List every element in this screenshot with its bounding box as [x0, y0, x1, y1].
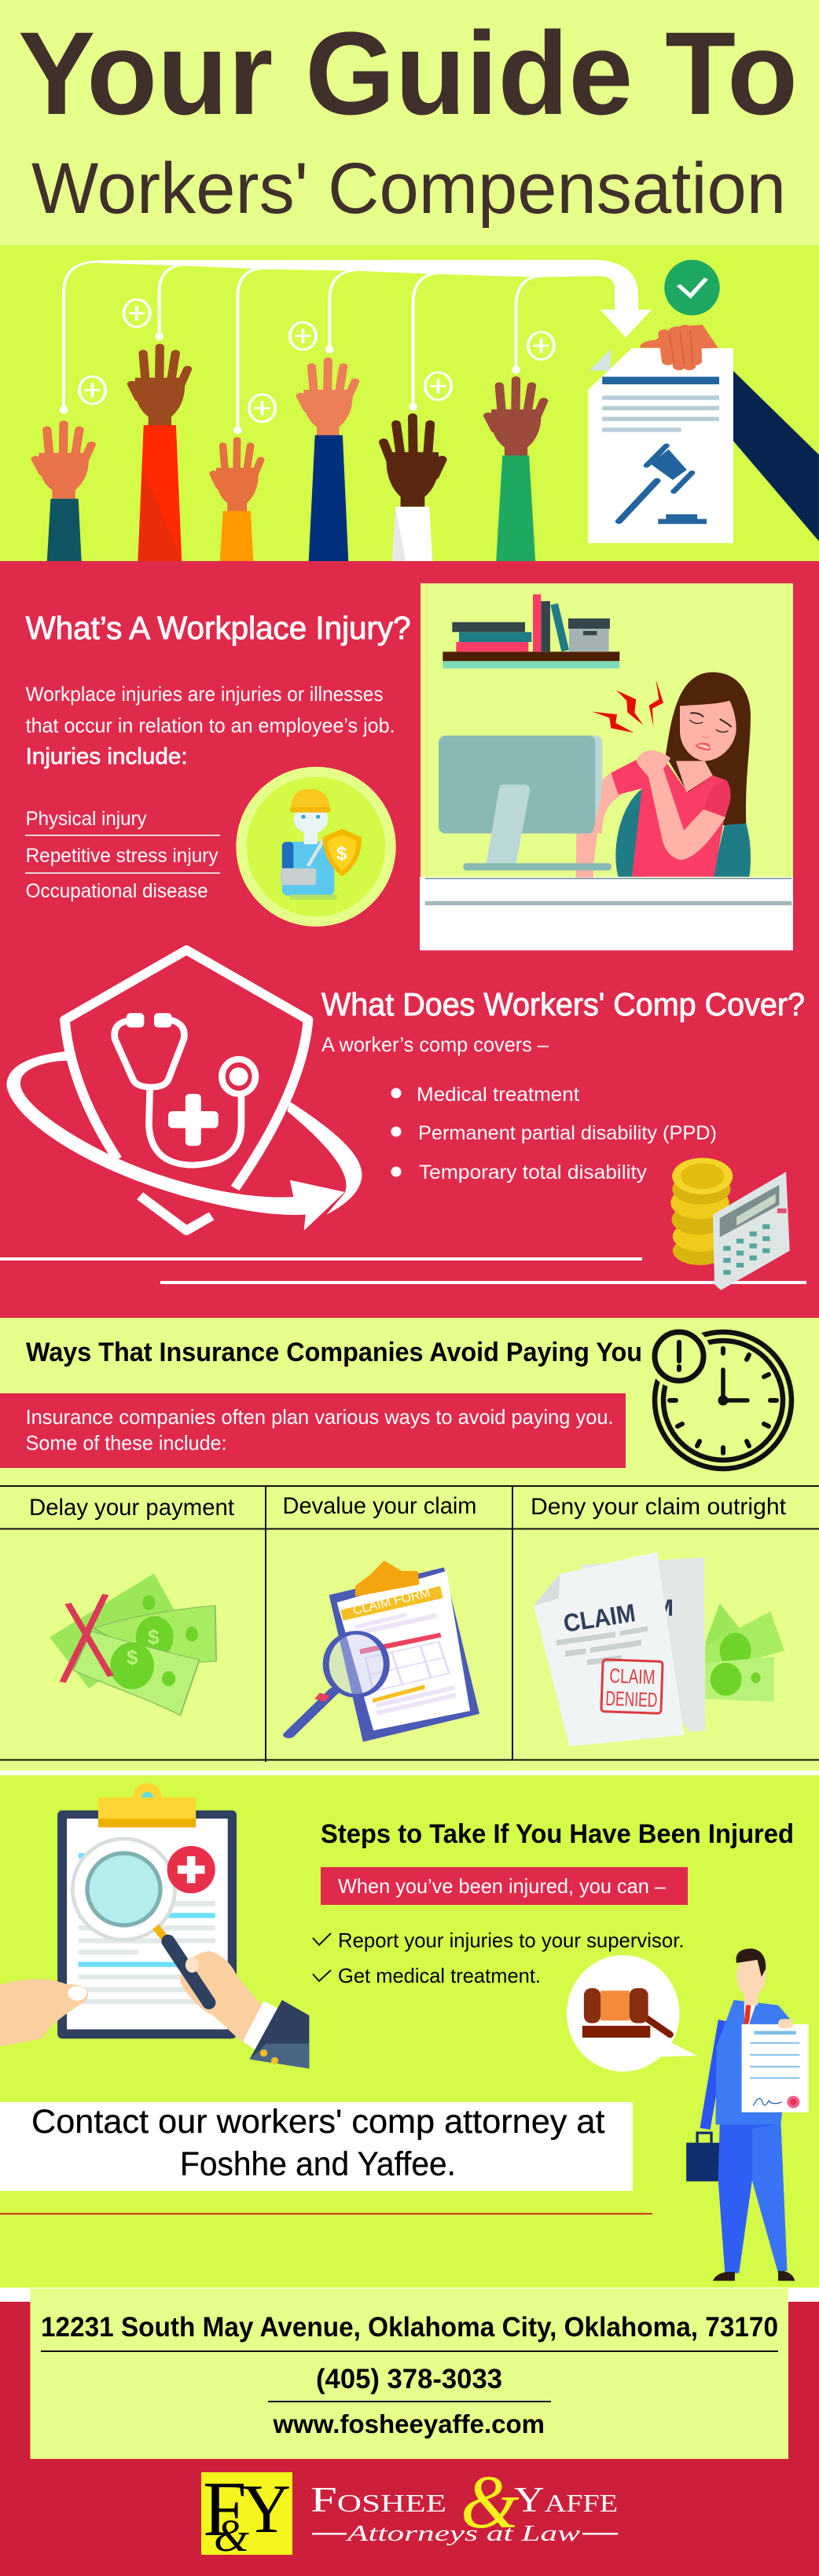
logo: Foshee & Yaffe: Attorneys at Law	[345, 2522, 580, 2546]
list: coverage: Permanent partial disability (PPD)	[418, 1122, 717, 1144]
icon: coins and calculator	[670, 1158, 790, 1290]
callout: when injured	[321, 1867, 688, 1905]
illustration: gavel speech bubble	[567, 1955, 697, 2071]
logo: Foshee & Yaffe: Foshee	[310, 2480, 446, 2519]
logo: Foshee & Yaffe: Y	[242, 2471, 291, 2548]
dollar signs on money	[127, 1625, 160, 1669]
white strip	[0, 1771, 819, 1775]
logo: Foshee & Yaffe	[201, 2460, 618, 2561]
panel: red section	[0, 561, 819, 1318]
table grid	[0, 1485, 819, 1762]
illustration: claim denied documents: M	[654, 1595, 674, 1621]
icon: medical shield with stethoscope	[7, 950, 362, 1231]
column heading: deny: Deny your claim outright	[531, 1494, 787, 1520]
hand 4	[300, 361, 355, 561]
panel: insurance companies section	[0, 1318, 819, 1771]
callout: contact attorney: Contact our workers' comp attorney at	[31, 2103, 605, 2141]
arrow: white branching arrow	[60, 260, 652, 434]
logo: Foshee & Yaffe: Yaffe	[514, 2480, 618, 2519]
document with gavel	[588, 348, 733, 543]
list: steps with checkmarks: Get medical treatment.	[338, 1964, 541, 1987]
panel: contact details: 12231 South May Avenue, Oklahoma City, Oklahoma, 73170	[41, 2312, 778, 2343]
list: coverage	[391, 1084, 717, 1183]
hand 1	[35, 424, 91, 561]
front claim page	[534, 1552, 684, 1746]
list: injury types: Occupational disease	[26, 880, 208, 902]
woman	[592, 672, 751, 877]
subheading: injuries include: Injuries include:	[26, 744, 188, 769]
heading: what does workers comp cover: What Does Workers' Comp Cover?	[321, 986, 805, 1022]
icons: plus circles	[79, 299, 554, 422]
panel: footer	[0, 2288, 819, 2576]
stamp: claim denied: DENIED	[605, 1686, 658, 1712]
text block: definition	[26, 682, 395, 737]
green bills	[580, 1558, 784, 1732]
label: claim form: CLAIM FORM	[352, 1586, 432, 1617]
panel: contact details: www.fosheeyaffe.com	[272, 2409, 545, 2438]
stamp: claim denied: CLAIM	[609, 1664, 656, 1689]
shelf with books	[443, 594, 619, 669]
hand holding document	[640, 325, 718, 366]
logo: Foshee & Yaffe: &	[214, 2510, 249, 2561]
column heading: delay: Delay your payment	[29, 1495, 235, 1521]
dollar signs on money: $	[127, 1646, 138, 1669]
callout: insurance intro: Some of these include:	[26, 1431, 227, 1455]
illustration: claim denied documents: CLAIM	[561, 1598, 637, 1638]
callout: when injured: When you’ve been injured, you can –	[338, 1874, 667, 1898]
callout: insurance intro: Insurance companies often plan various ways to avoid paying you.	[26, 1405, 614, 1429]
hand 3	[213, 440, 261, 561]
list: coverage: Temporary total disability	[419, 1161, 648, 1183]
hand 2	[131, 347, 188, 561]
subtitle: Workers' Compensation	[31, 149, 786, 229]
list: coverage: Medical treatment	[417, 1084, 579, 1106]
list: steps with checkmarks: Report your injuries to your supervisor.	[338, 1928, 684, 1952]
logo: Foshee & Yaffe: &	[461, 2460, 520, 2544]
callout: insurance intro	[0, 1393, 626, 1468]
text block: definition: Workplace injuries are injuries or illnesses	[26, 682, 384, 706]
callout: contact attorney: Foshhe and Yaffee.	[180, 2145, 456, 2183]
icon: pain bolts	[592, 679, 663, 732]
list: injury types: Physical injury	[26, 808, 147, 830]
illustration: lawyer with briefcase and document	[686, 1948, 809, 2281]
icon: alarm clock	[651, 1328, 791, 1469]
illustration: woman with shoulder pain at desk	[420, 583, 793, 950]
text: $	[336, 843, 347, 864]
hand 6	[488, 380, 544, 561]
icon: green check badge	[664, 260, 720, 315]
hand 5	[384, 417, 443, 561]
column heading: devalue: Devalue your claim	[283, 1493, 476, 1519]
illustration: money crossed out	[50, 1573, 216, 1715]
heading: steps to take: Steps to Take If You Have Been Injured	[321, 1819, 794, 1849]
text block: covers intro: A worker’s comp covers –	[321, 1033, 549, 1056]
list: injury types	[25, 808, 220, 902]
background: header band	[0, 0, 819, 246]
illustration: claim denied documents	[534, 1552, 784, 1746]
panel: raised hands illustration	[0, 245, 819, 563]
list: steps with checkmarks	[313, 1928, 684, 1987]
dollar signs on money: $	[148, 1625, 160, 1649]
callout: contact attorney	[0, 2102, 633, 2191]
illustration: claim form under magnifier	[288, 1561, 479, 1741]
stamp: claim denied	[601, 1660, 663, 1713]
sleeve of hand holding document	[733, 371, 819, 541]
panel: contact details: (405) 378-3033	[316, 2364, 502, 2394]
panel: contact details	[30, 2288, 788, 2459]
title: Your Guide To	[18, 7, 798, 139]
illustration: clipboard under magnifier with hands	[0, 1783, 309, 2068]
computer monitor	[439, 736, 611, 878]
logo: Foshee & Yaffe: F	[203, 2465, 247, 2552]
icon: injured worker	[236, 767, 396, 927]
heading: ways insurers avoid paying: Ways That Insurance Companies Avoid Paying You	[26, 1338, 642, 1367]
panel: steps section	[0, 1775, 819, 2288]
text block: definition: that occur in relation to an employee’s job.	[26, 714, 395, 737]
heading: what is a workplace injury: What’s A Workplace Injury?	[26, 610, 411, 646]
divider lines	[0, 1257, 806, 1284]
list: injury types: Repetitive stress injury	[26, 845, 219, 867]
